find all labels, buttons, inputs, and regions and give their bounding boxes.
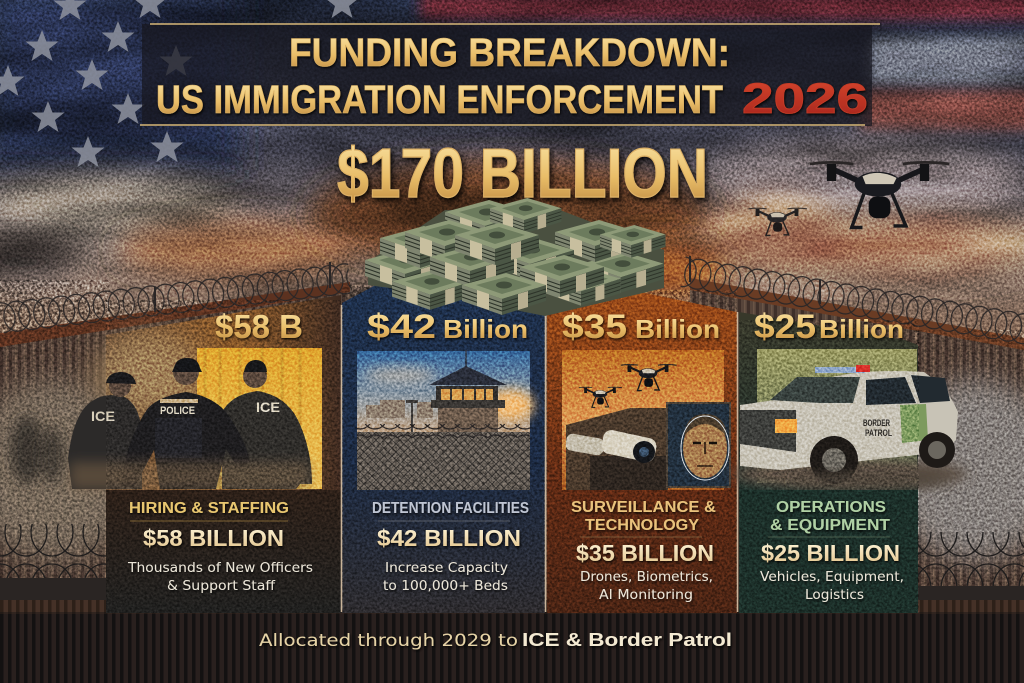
text: police patch: POLICE	[160, 405, 195, 417]
stars of the flag	[0, 0, 358, 167]
title year: 2026	[742, 75, 868, 123]
description: Drones, Biometrics,	[580, 569, 713, 585]
amount: $42 BILLION	[377, 525, 521, 551]
amount label: Billion	[635, 314, 720, 344]
category label	[770, 499, 891, 534]
footer note: Allocated through 2029 to	[259, 631, 518, 651]
face scan screen	[667, 403, 730, 487]
total amount heading: $170 BILLION	[337, 134, 708, 212]
panel: detention facilities	[342, 280, 546, 613]
category label: & EQUIPMENT	[770, 517, 891, 534]
category label: OPERATIONS	[776, 499, 886, 516]
amount: $25 BILLION	[761, 540, 900, 566]
image: officers	[68, 348, 322, 490]
lower razor wire right	[918, 532, 1024, 588]
amount label: Billion	[443, 314, 528, 344]
title line two: US IMMIGRATION ENFORCEMENT	[156, 78, 723, 122]
category label: DETENTION FACILITIES	[372, 500, 529, 517]
description: Vehicles, Equipment,	[760, 569, 904, 585]
description: Increase Capacity	[385, 560, 508, 576]
info card background	[106, 490, 341, 613]
text: ice patch right: ICE	[256, 399, 280, 415]
panel: surveillance and technology	[547, 280, 738, 613]
text: vehicle markings	[863, 418, 892, 438]
amount label	[754, 308, 904, 346]
amount label: $25	[754, 308, 816, 346]
right razor wire and wall	[680, 254, 1024, 620]
description: Thousands of New Officers	[127, 560, 313, 576]
category label: HIRING & STAFFING	[129, 500, 289, 517]
category label: TECHNOLOGY	[585, 517, 700, 534]
amount label	[367, 308, 528, 346]
bottom corrugated wall	[0, 578, 1024, 683]
category label: SURVEILLANCE &	[571, 499, 716, 516]
left razor wire and wall	[0, 260, 352, 620]
amount label	[562, 308, 720, 346]
image: drones and cameras	[562, 350, 730, 490]
icon: small drone	[748, 208, 807, 236]
amount: $58 BILLION	[143, 525, 284, 551]
image: border patrol vehicle	[732, 349, 968, 490]
amount: $35 BILLION	[576, 540, 714, 566]
title line one: FUNDING BREAKDOWN:	[289, 31, 730, 75]
amount label: $58 B	[215, 308, 303, 345]
panel: hiring and staffing	[68, 295, 341, 613]
icon: large drone	[810, 162, 949, 228]
text: vehicle markings: PATROL	[865, 428, 892, 438]
footer note	[259, 630, 732, 651]
panel: surveillance and technology: AI Monitoring	[599, 587, 693, 603]
icon: stack of cash	[365, 198, 666, 316]
text: vehicle markings: BORDER	[863, 418, 890, 428]
title banner	[140, 24, 880, 126]
footer note: ICE & Border Patrol	[522, 630, 732, 650]
panel: hiring and staffing: & Support Staff	[167, 578, 276, 594]
amount label: $35	[562, 308, 627, 346]
panel: operations and equipment	[732, 308, 968, 613]
text: ice patch left: ICE	[91, 408, 115, 424]
image: watchtower	[357, 350, 534, 490]
lower razor wire left	[0, 524, 106, 580]
panel: detention facilities: to 100,000+ Beds	[383, 578, 508, 594]
amount label: Billion	[819, 314, 904, 344]
amount label: $42	[367, 308, 436, 346]
icon: security cameras	[565, 429, 658, 463]
category label	[571, 499, 716, 534]
panel: operations and equipment: Logistics	[805, 587, 864, 603]
